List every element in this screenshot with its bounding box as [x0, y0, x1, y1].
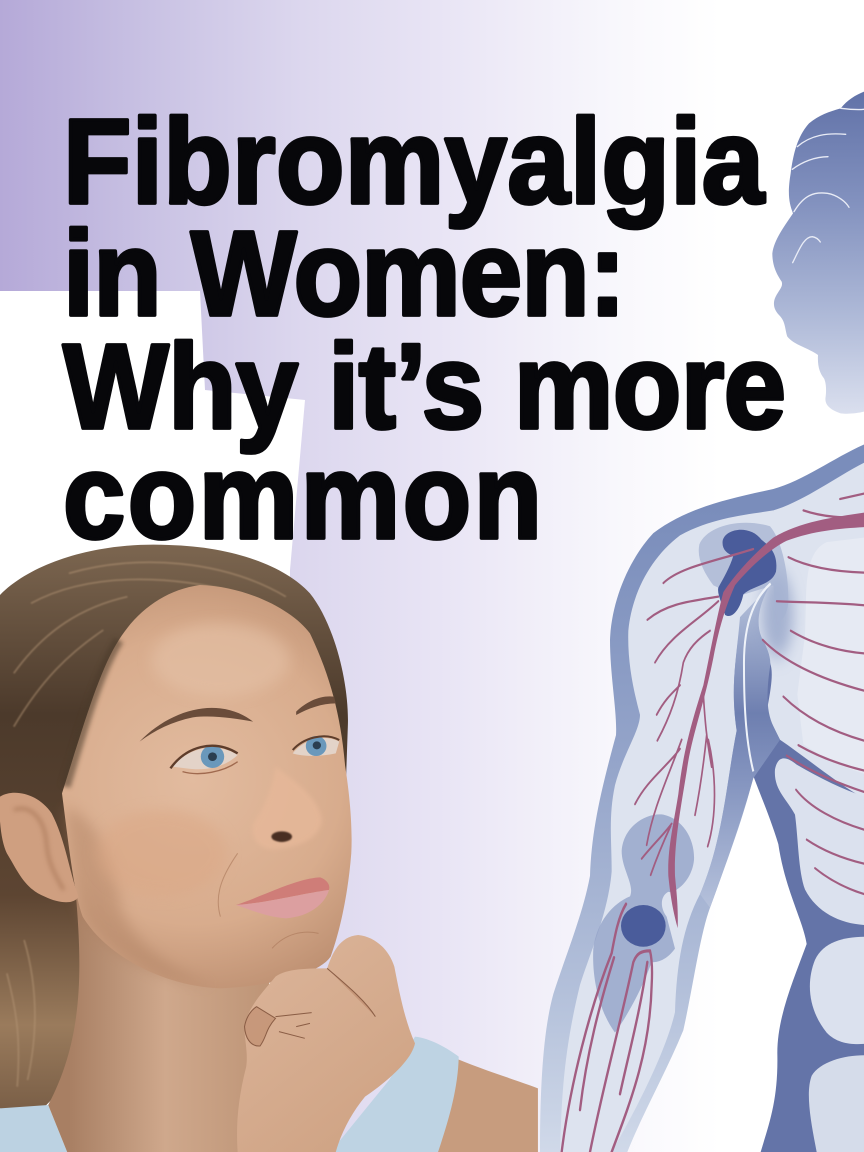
- illustration: arm and torso nervous system: [540, 445, 864, 1152]
- ear: [0, 793, 79, 902]
- nerve branches: chest ribs: [763, 494, 864, 894]
- left eyebrow: [139, 708, 253, 742]
- thumb shadow and knuckle lines: [245, 968, 375, 1046]
- photo: thoughtful woman: [0, 545, 538, 1152]
- wrist node: [621, 905, 666, 947]
- torso dark silhouette: [740, 467, 864, 1152]
- shirt left: [0, 1105, 67, 1152]
- hairline shadow: [65, 640, 119, 787]
- icon: head silhouette: [772, 92, 864, 414]
- title line 2: in Women:: [63, 205, 626, 341]
- shirt right: [331, 1037, 459, 1152]
- shoulder: [434, 1055, 538, 1152]
- collar edge line: [744, 583, 771, 771]
- nose: [252, 767, 322, 849]
- nerve branches: forearm: [562, 904, 652, 1152]
- band between arm and chest: [700, 585, 780, 908]
- forehead highlight: [152, 623, 289, 697]
- lower rib panel: [775, 758, 864, 925]
- face shading: [65, 807, 214, 985]
- hand: [237, 935, 415, 1152]
- abdomen panel upper: [810, 937, 864, 1044]
- arm inner light region: [560, 510, 780, 1152]
- left eye: [170, 745, 238, 774]
- title line 3: Why it’s more: [63, 318, 786, 454]
- shoulder soft shadow: [761, 572, 793, 658]
- title line 1: Fibromyalgia: [63, 93, 765, 229]
- ear inner: [14, 809, 64, 890]
- hair: [0, 545, 348, 1110]
- main nerve trunk: [668, 513, 864, 928]
- right eye: [293, 736, 339, 756]
- title: [63, 93, 786, 564]
- right eyebrow: [296, 696, 336, 715]
- elbow halo: [593, 814, 694, 1033]
- upper chest light region: [740, 463, 864, 799]
- face: [62, 585, 352, 988]
- nasolabial and chin lines: [218, 853, 319, 948]
- cheek highlight: [96, 810, 227, 897]
- abdomen panel lower: [809, 1055, 864, 1152]
- chest light panel: [797, 538, 864, 774]
- neck: [48, 893, 276, 1152]
- title line 4: common: [63, 428, 542, 564]
- arm outer silhouette: [540, 445, 864, 1152]
- shoulder joint halo: [699, 523, 788, 622]
- lips: [236, 877, 329, 918]
- shoulder joint nodes: [718, 530, 776, 616]
- hair strands: [7, 562, 286, 1087]
- nerve branches: arm: [635, 549, 753, 875]
